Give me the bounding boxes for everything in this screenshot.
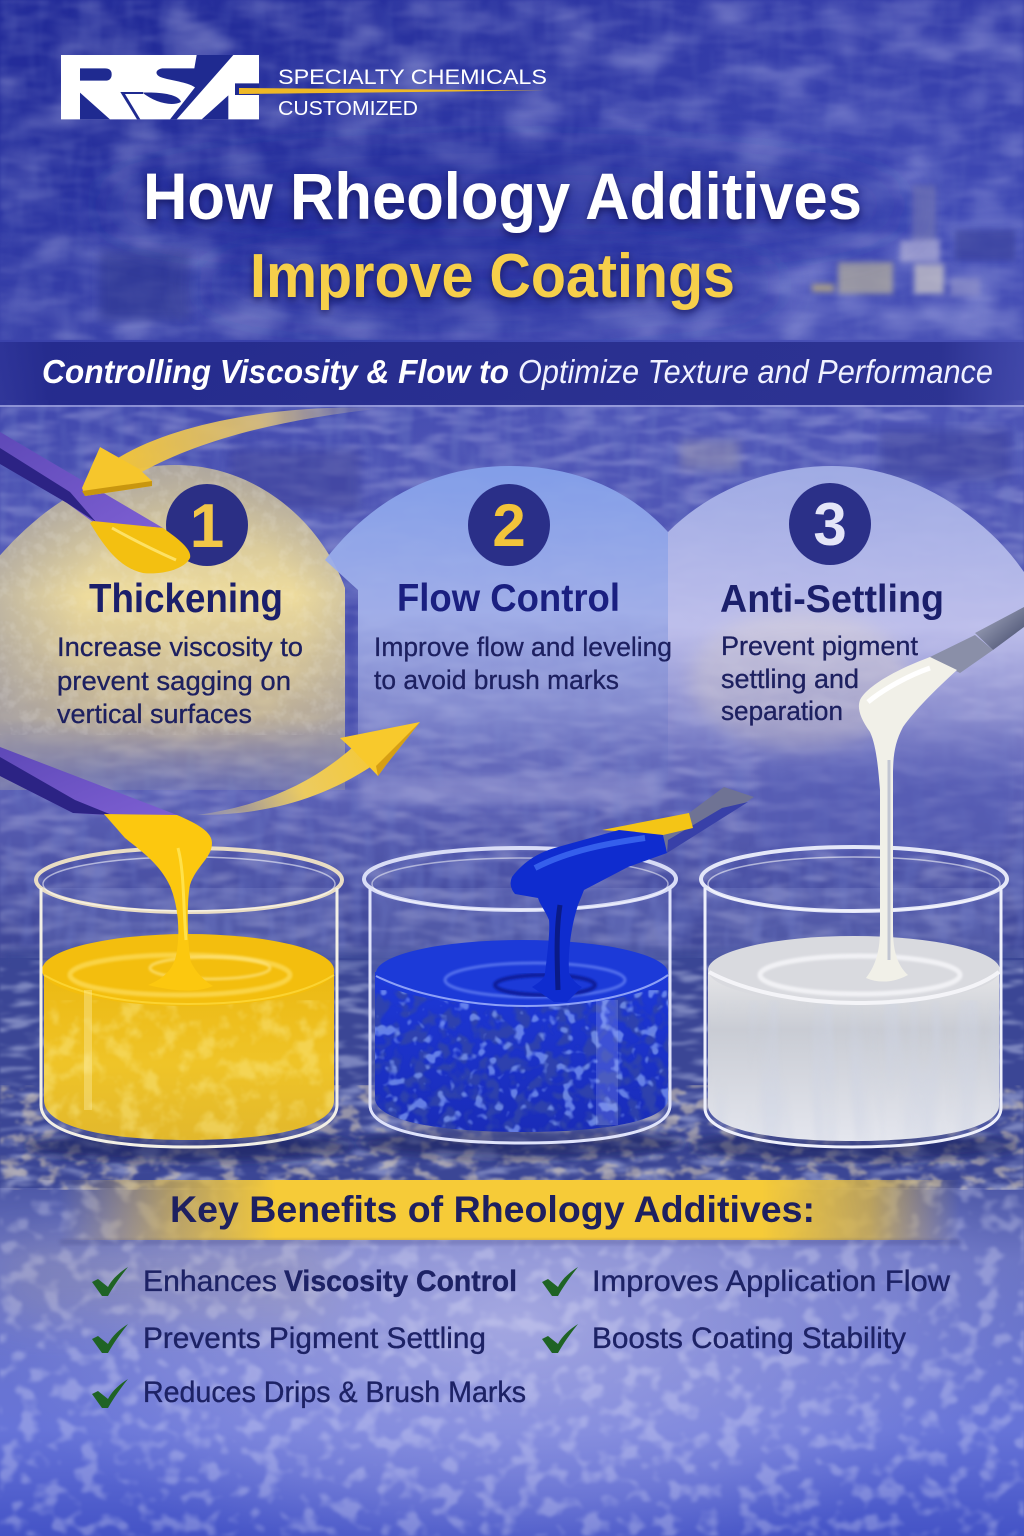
- benefit: pigment settling: Prevents Pigment Settling: [143, 1322, 486, 1355]
- beaker: blue: [355, 787, 754, 1158]
- panel: anti-settling: [668, 466, 1024, 790]
- text thickening: [57, 632, 303, 729]
- benefit: viscosity control: [92, 1265, 517, 1298]
- number badge 1: [166, 484, 248, 566]
- text anti-settling: [721, 631, 918, 726]
- logo tagline: SPECIALTY CHEMICALS: [278, 66, 547, 89]
- lower cobble texture: [0, 1180, 1024, 1536]
- number badge 2: 2: [492, 492, 526, 559]
- heading flow control: Flow Control: [397, 577, 620, 620]
- text anti-settling: settling and: [721, 664, 859, 694]
- text thickening: prevent sagging on: [57, 666, 291, 696]
- benefits list: [92, 1265, 950, 1409]
- title line 1: How Rheology Additives: [143, 159, 862, 233]
- benefits heading banner: [60, 1180, 960, 1244]
- blue spatula and drip: [511, 787, 754, 1002]
- text thickening: Increase viscosity to: [57, 632, 303, 662]
- white liquid: [705, 936, 1003, 1142]
- glass back: [705, 888, 1001, 1147]
- spatula: upper purple and yellow: [0, 432, 190, 573]
- yellow liquid: [40, 934, 340, 1145]
- logo tagline 2: CUSTOMIZED: [278, 97, 418, 120]
- subtitle banner: [0, 342, 1024, 407]
- logo gold line: [239, 88, 545, 94]
- text flow control: Improve flow and leveling: [374, 632, 672, 662]
- glass front: [364, 848, 676, 1143]
- glass back: [40, 888, 338, 1147]
- subtitle regular: Optimize Texture and Performance: [518, 353, 993, 390]
- logo: [61, 55, 547, 120]
- number badge 2: [468, 484, 550, 566]
- text flow control: to avoid brush marks: [374, 665, 619, 695]
- benefit: application flow: Improves Application Flow: [592, 1265, 950, 1298]
- heading anti-settling: Anti-Settling: [720, 578, 944, 621]
- glass back: [369, 888, 671, 1143]
- white spatula and drip: [859, 607, 1024, 982]
- logo mark RSA: [61, 55, 259, 119]
- blue liquid: [370, 940, 675, 1135]
- text thickening: vertical surfaces: [57, 699, 252, 729]
- subtitle bold: Controlling Viscosity & Flow to: [42, 353, 509, 390]
- text anti-settling: Prevent pigment: [721, 631, 918, 661]
- panel: flow control: [325, 466, 672, 790]
- beaker: yellow: [0, 747, 354, 1162]
- number badge 3: [789, 483, 871, 565]
- benefit: viscosity control: Enhances: [143, 1265, 277, 1298]
- number badge 3: 3: [813, 491, 847, 558]
- text anti-settling: separation: [721, 696, 843, 726]
- glass front: [701, 847, 1007, 1147]
- beaker: white: [689, 607, 1024, 1161]
- text flow control: [374, 632, 672, 695]
- benefit: drips: Reduces Drips & Brush Marks: [143, 1376, 526, 1409]
- yellow spatula and drip: [0, 747, 213, 991]
- panel: thickening: [0, 465, 345, 790]
- arrow: lower: [197, 722, 420, 815]
- glass front: [36, 848, 342, 1147]
- benefit: stability: Boosts Coating Stability: [592, 1322, 906, 1355]
- tabletop texture: [0, 950, 1024, 1190]
- number badge 1: 1: [190, 492, 224, 561]
- benefits heading: Key Benefits of Rheology Additives:: [170, 1189, 815, 1230]
- heading thickening: Thickening: [89, 575, 283, 621]
- benefit: viscosity control: Viscosity Control: [284, 1265, 517, 1298]
- title line 2: Improve Coatings: [250, 242, 735, 311]
- arrow: upper: [82, 407, 385, 496]
- title: [143, 159, 862, 311]
